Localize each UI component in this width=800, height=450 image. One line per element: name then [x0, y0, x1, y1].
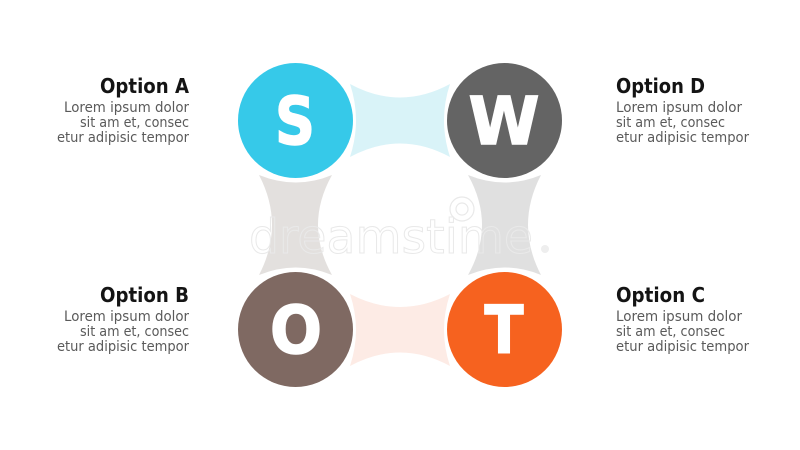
text: Option A: sit am et, consec: [80, 115, 189, 131]
circle T: [447, 272, 562, 387]
text: Option C: etur adipisic tempor: [616, 339, 749, 355]
text: Option B: [57, 283, 189, 355]
text: Option B: sit am et, consec: [80, 324, 189, 340]
text: Option A: Lorem ipsum dolor: [64, 100, 189, 116]
text: Option D: Option D: [616, 74, 705, 98]
text: Option B: Option B: [100, 283, 189, 307]
text: Option B: etur adipisic tempor: [57, 339, 189, 355]
circle O: [238, 272, 353, 387]
watermark: dreamstime: [249, 210, 533, 265]
watermark dot: [541, 245, 549, 253]
text: Option B: Lorem ipsum dolor: [64, 309, 189, 325]
text: Option A: etur adipisic tempor: [57, 130, 189, 146]
connector: left, warm grey: [259, 175, 332, 275]
text: Option C: sit am et, consec: [616, 324, 725, 340]
circle W: [447, 63, 562, 178]
text: Option C: Lorem ipsum dolor: [616, 309, 742, 325]
circle T: T: [484, 292, 524, 369]
circle W: W: [468, 83, 540, 160]
watermark spiral: [450, 197, 474, 221]
text: Option A: Option A: [100, 74, 189, 98]
text: Option A: [57, 74, 189, 146]
text: Option D: sit am et, consec: [616, 115, 725, 131]
connector: bottom, peach: [350, 294, 450, 366]
connector: right, grey: [468, 175, 541, 275]
text: Option D: [616, 74, 749, 146]
circle O: O: [270, 292, 322, 369]
text: Option D: Lorem ipsum dolor: [616, 100, 742, 116]
text: Option C: Option C: [616, 283, 705, 307]
text: Option D: etur adipisic tempor: [616, 130, 749, 146]
connector: top, blue: [350, 84, 450, 157]
text: Option C: [616, 283, 749, 355]
circle S: S: [275, 83, 315, 160]
circle S: [238, 63, 353, 178]
